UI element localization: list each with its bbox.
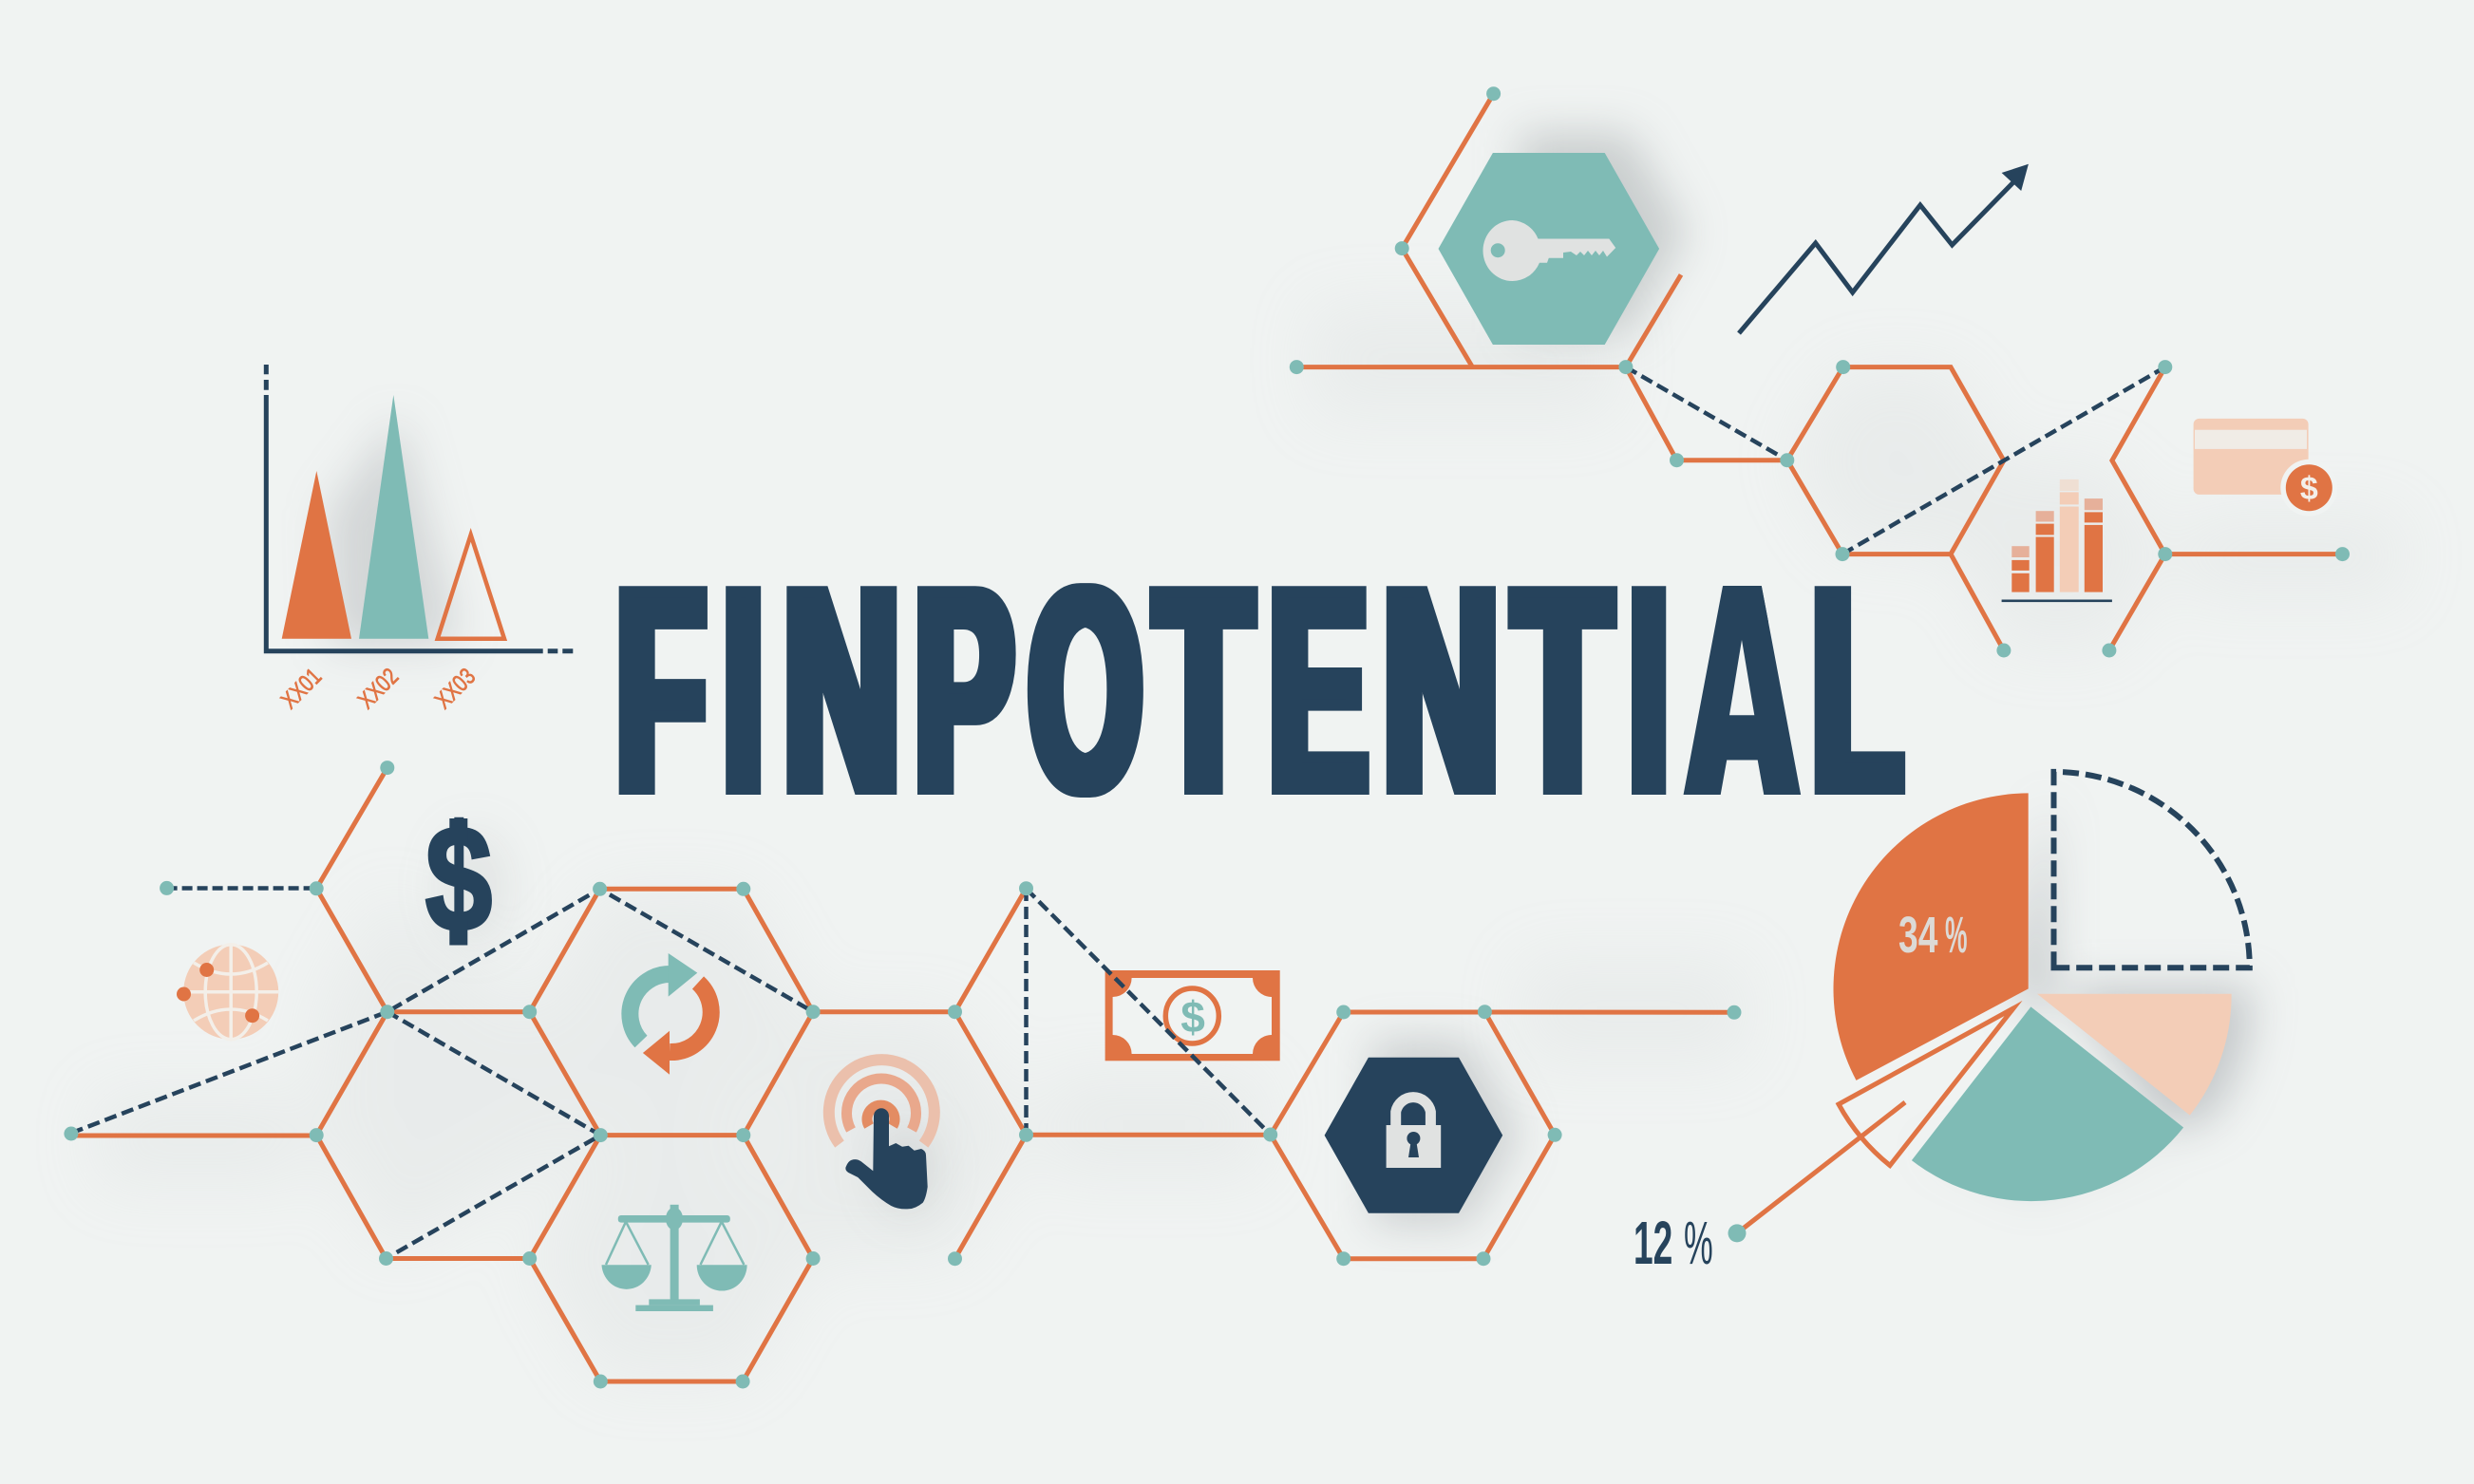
top right hexagon network xyxy=(1290,86,2350,657)
pie slice: peach xyxy=(2037,994,2232,1116)
pie slice: outlined 12% xyxy=(1839,1008,2013,1166)
title: FINPOTENTIAL: T xyxy=(1155,529,1252,850)
bar XX03 xyxy=(438,535,504,639)
title: FINPOTENTIAL: P xyxy=(916,530,1013,850)
icon: refresh arrows xyxy=(630,953,711,1075)
icon: credit card with coin: $ xyxy=(2300,471,2318,507)
connector nodes xyxy=(1290,86,2350,657)
icon: touch hand xyxy=(829,1060,935,1209)
title: FINPOTENTIAL: L xyxy=(1812,530,1902,850)
dashed connectors xyxy=(71,889,1271,1259)
icon: rising arrow xyxy=(1739,164,2029,333)
icon: credit card with coin xyxy=(2194,419,2337,517)
icon: dollar banknote: $ xyxy=(1180,992,1205,1042)
axis labels: XX02 xyxy=(352,663,404,714)
icon: balance scale xyxy=(602,1205,747,1311)
title: FINPOTENTIAL: N xyxy=(784,530,899,850)
icon: dollar banknote xyxy=(1105,970,1280,1061)
icon: dollar sign: $ xyxy=(425,796,492,963)
orange connector lines xyxy=(71,768,1734,1381)
icon: key in teal hexagon xyxy=(1438,153,1659,345)
12% callout: % xyxy=(1684,1209,1713,1277)
title: FINPOTENTIAL: T xyxy=(1514,530,1612,850)
title: FINPOTENTIAL: F xyxy=(617,530,705,850)
axis labels: XX03 xyxy=(429,663,481,714)
chart axes xyxy=(266,365,573,651)
title: FINPOTENTIAL: E xyxy=(1270,530,1368,850)
pie chart xyxy=(1833,772,2250,1201)
title: FINPOTENTIAL: I xyxy=(724,531,763,851)
title: FINPOTENTIAL: O xyxy=(1029,529,1142,850)
connector nodes xyxy=(64,761,1741,1388)
icon: globe xyxy=(177,945,278,1040)
title: FINPOTENTIAL: I xyxy=(1630,531,1668,851)
axis labels xyxy=(275,663,481,714)
bar XX02 xyxy=(359,395,428,639)
pie slice: orange 34% xyxy=(1833,793,2029,1080)
icon: stacked bar chart xyxy=(2002,479,2112,602)
lower hexagon network xyxy=(64,761,1741,1388)
bar XX01 xyxy=(282,471,351,639)
title: FINPOTENTIAL xyxy=(617,529,1902,851)
label: 34%: 34 xyxy=(1898,906,1938,964)
dashed connectors xyxy=(1626,367,2165,554)
pie slice: teal xyxy=(1912,1006,2183,1201)
triangle bar chart xyxy=(266,365,573,714)
icon: padlock in navy hexagon xyxy=(1325,1058,1502,1213)
label: 34%: % xyxy=(1945,908,1968,965)
title: FINPOTENTIAL: N xyxy=(1384,530,1499,850)
title: FINPOTENTIAL: A xyxy=(1689,529,1796,850)
12% callout xyxy=(1634,1102,1905,1278)
orange connector lines xyxy=(1296,94,2342,650)
pie slice: dashed outline xyxy=(2053,772,2250,967)
12% callout: 12 xyxy=(1634,1211,1672,1278)
axis labels: XX01 xyxy=(275,663,327,714)
label: 34% xyxy=(1898,906,1968,965)
